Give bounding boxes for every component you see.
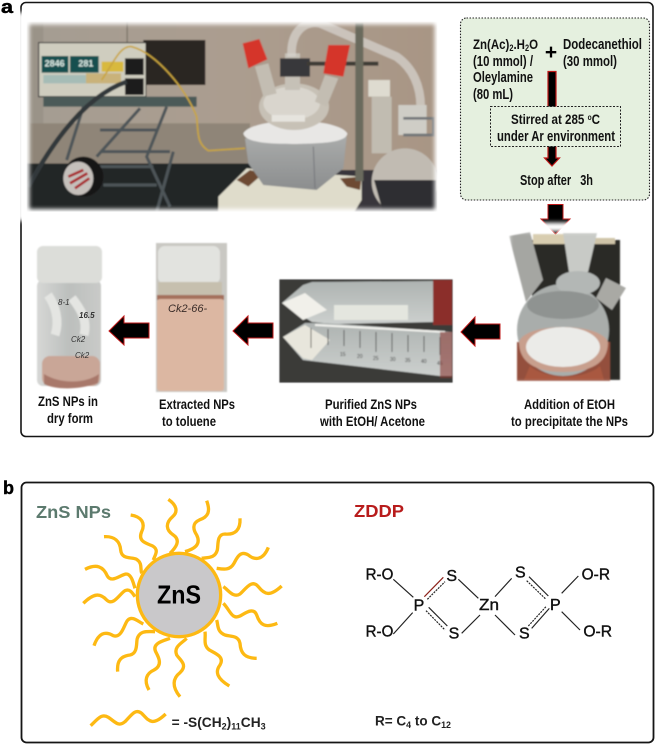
tape roll: [63, 157, 103, 197]
clamp rod: [355, 23, 363, 181]
arrow: flask to tubes: [461, 317, 500, 346]
reaction scheme box: [460, 18, 650, 200]
photo: dry ZnS NPs vial: [37, 246, 102, 388]
R group note: 12: [441, 720, 451, 730]
atom labels: P: [414, 598, 424, 615]
caption: purified: Purified ZnS NPs: [325, 397, 417, 412]
photo: centrifuge tubes: 25: [373, 356, 379, 362]
soft photo edge: [23, 18, 441, 215]
caption: dry form: dry form: [47, 411, 93, 426]
caption: addition: to precipitate the NPs: [511, 414, 628, 429]
caption: dry form: ZnS NPs in: [38, 394, 98, 409]
atom labels: S: [449, 626, 459, 643]
diagram: ZDDP structure: [366, 565, 612, 730]
panel b: ZnS NPs and ZDDP structures: [22, 482, 654, 742]
diagram: ZnS nanoparticle with ligands: [83, 499, 282, 732]
atom labels: [366, 565, 612, 643]
atom labels: Zn: [479, 597, 499, 614]
reagents left: O: [529, 36, 538, 52]
reaction condition box: o: [588, 113, 592, 122]
heating mantle: [245, 137, 347, 190]
handwritten vial label: Ck2: [71, 335, 86, 344]
reagents left: Zn(Ac): [473, 36, 517, 52]
photo: extracted NPs in toluene: [156, 243, 227, 392]
atom labels: S: [519, 626, 530, 643]
photo: reaction setup with flask and heating mantle: 2846: [45, 59, 65, 69]
legend: ligand formula: = -S(CH: [172, 715, 221, 730]
arrow: reaction progress: [544, 72, 560, 166]
heading: ZDDP: ZDDP: [354, 501, 404, 521]
arrow: down to flask: [541, 204, 570, 234]
hot plate: [218, 168, 362, 213]
reaction condition box: under Ar environment: [497, 129, 615, 145]
photo: centrifuge tubes: 40: [421, 359, 427, 365]
legend: ligand wave: [91, 712, 166, 726]
legend: ligand formula: CH: [241, 715, 261, 730]
plus sign: +: [545, 41, 557, 64]
R group note: R= C: [375, 713, 406, 728]
legend: ligand formula: ): [227, 715, 231, 730]
caption: extracted: [159, 397, 235, 429]
atom labels: O-R: [583, 624, 612, 641]
stop step: Stop after 3h: [520, 173, 593, 189]
reagents right: [563, 37, 642, 70]
bonds: [393, 576, 580, 635]
soft photo edge: [277, 277, 455, 385]
handwritten vial label: Ck2-66-: [168, 303, 207, 315]
arrow: tubes to toluene vial: [233, 316, 273, 345]
reagents left: [473, 36, 538, 103]
caption: purified: [319, 397, 425, 429]
instrument: [143, 40, 205, 85]
R group note: to C: [411, 713, 441, 728]
heading: ZnS NPs: ZnS NPs: [36, 502, 111, 522]
atom labels: P: [550, 597, 561, 614]
caption: extracted: to toluene: [162, 414, 216, 429]
photo: flask with precipitate: [505, 227, 633, 387]
atom labels: R-O: [366, 566, 393, 583]
legend: ligand formula: 3: [261, 722, 266, 732]
handwritten vial label: Ck2: [75, 351, 90, 360]
caption: addition: [511, 397, 628, 429]
panel label b: b: [3, 478, 14, 498]
core label: ZnS: [157, 580, 201, 610]
reagents right: Dodecanethiol: [563, 37, 642, 53]
atom labels: R-O: [366, 624, 393, 641]
atom labels: S: [446, 568, 457, 585]
photo: reaction setup with flask and heating mantle: [23, 18, 441, 217]
photo: centrifuge tubes: 45: [437, 361, 443, 367]
handwritten vial label: 16.5: [79, 311, 95, 320]
caption: extracted: Extracted NPs: [159, 397, 235, 412]
caption: dry form: [38, 394, 98, 426]
ligand chains: [83, 499, 282, 697]
receiving flask: [368, 80, 390, 97]
reagents left: (80 mL): [473, 87, 513, 103]
photo: centrifuge tubes: 20: [357, 354, 363, 360]
stand: [43, 97, 197, 107]
reagents left: 2: [525, 43, 529, 53]
caption: addition: Addition of EtOH: [524, 397, 615, 412]
R group note: 4: [406, 720, 411, 730]
photo: reaction setup with flask and heating mantle: 281: [78, 59, 93, 69]
legend: ligand formula: 11: [231, 722, 241, 732]
atom labels: S: [515, 565, 526, 582]
arrow: toluene vial to dry vial: [109, 316, 149, 345]
handwritten vial label: 8-1: [58, 298, 70, 307]
nanoparticle core: [137, 553, 221, 637]
atom labels: O-R: [582, 566, 610, 583]
reagents left: .H: [513, 36, 525, 52]
reaction condition box: [490, 106, 620, 146]
photo: centrifuge tubes: 35: [405, 358, 411, 364]
reagents left: 2: [509, 43, 513, 53]
photo: centrifuge tubes: [277, 277, 455, 385]
reaction condition box: Stirred at 285: [511, 111, 600, 127]
reaction condition box: C: [592, 111, 600, 127]
soft photo edge: [505, 227, 633, 387]
legend: ligand formula: 2: [222, 722, 227, 732]
reagents right: (30 mmol): [563, 54, 617, 70]
reaction flask: [259, 83, 329, 130]
panel a: synthesis workflow: [21, 2, 653, 436]
cables: [28, 82, 127, 187]
reagents left: Oleylamine: [473, 70, 533, 86]
reagents left: (10 mmol) /: [473, 54, 533, 70]
photo: centrifuge tubes: 15: [340, 352, 346, 358]
caption: purified: with EtOH/ Acetone: [319, 414, 425, 429]
handwritten vial label: [58, 298, 95, 360]
photo: centrifuge tubes: 30: [390, 357, 396, 363]
